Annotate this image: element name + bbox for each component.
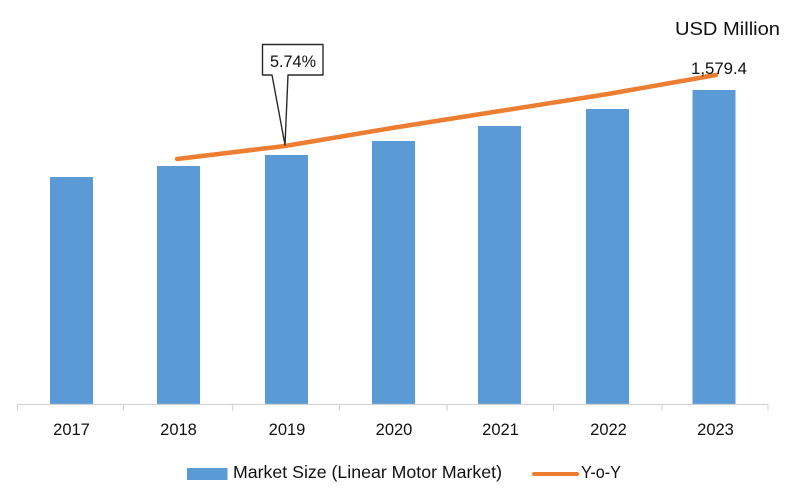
year labels: 2023	[697, 421, 734, 439]
year labels: 2019	[269, 421, 305, 439]
year labels	[53, 421, 734, 439]
year labels: 2020	[376, 421, 412, 439]
callout: 5.74%: 5.74%	[270, 53, 316, 71]
year labels: 2022	[590, 421, 627, 439]
year labels: 2017	[53, 421, 90, 439]
unit label: USD Million	[675, 18, 780, 39]
x axis	[17, 404, 768, 410]
legend	[187, 462, 621, 482]
legend swatch: Y-o-Y	[534, 472, 577, 476]
bars	[50, 90, 736, 404]
year labels: 2021	[482, 421, 519, 439]
legend label: market size: Market Size (Linear Motor Market)	[233, 462, 502, 482]
value label: 1,579.4	[691, 60, 747, 78]
year labels: 2018	[160, 421, 197, 439]
callout: 5.74%	[262, 44, 323, 145]
legend label: Y-o-Y: Y-o-Y	[581, 462, 621, 482]
Y-o-Y trend line	[177, 75, 716, 159]
legend swatch: market size	[187, 468, 228, 480]
